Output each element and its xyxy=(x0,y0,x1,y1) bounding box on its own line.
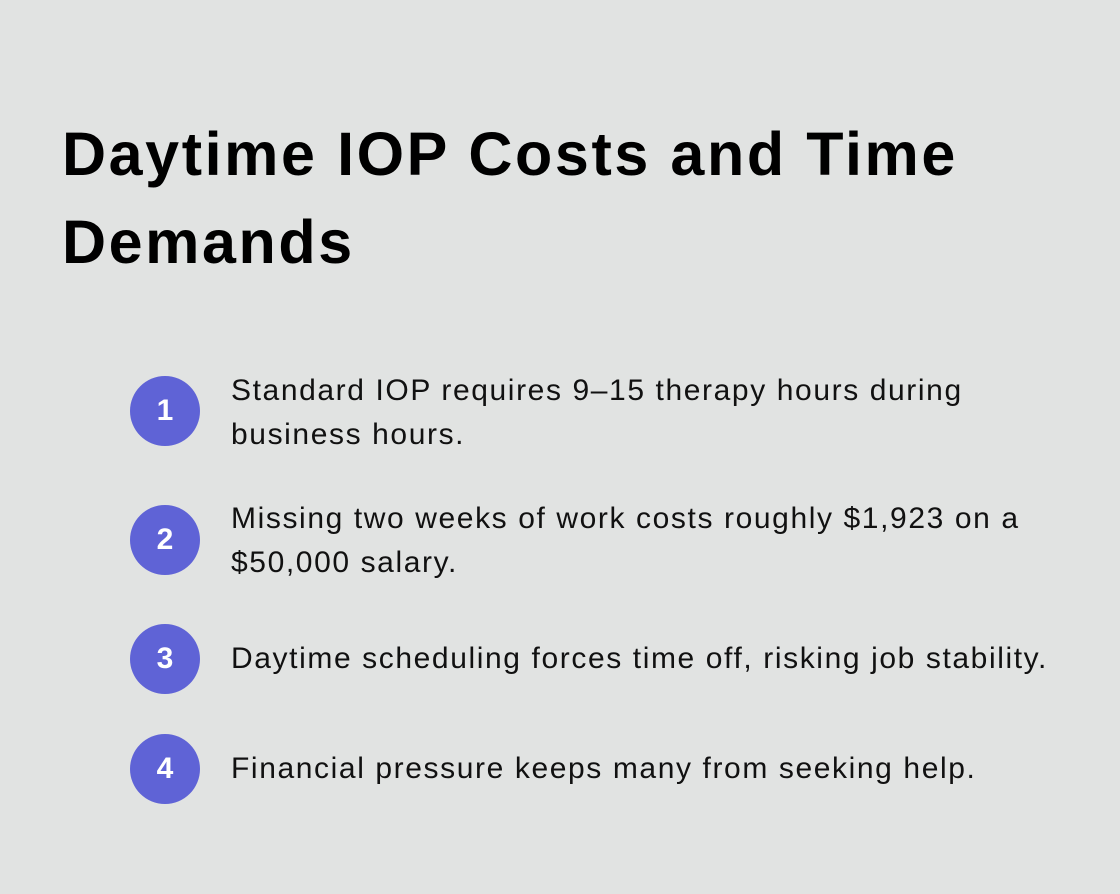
badge 4: 4 xyxy=(157,752,173,785)
badge 1: 1 xyxy=(157,394,173,427)
text 3: Daytime scheduling forces time off, risking job stability. xyxy=(231,642,1048,675)
item 3 xyxy=(130,624,1048,694)
badge 2 xyxy=(130,505,200,575)
badge 4 xyxy=(130,734,200,804)
title: Daytime IOP Costs and Time xyxy=(62,120,958,188)
text 4: Financial pressure keeps many from seeking help. xyxy=(231,752,976,785)
text 2: $50,000 salary. xyxy=(231,546,458,579)
badge 2: 2 xyxy=(157,523,173,556)
text 2 xyxy=(231,502,1020,579)
item 2 xyxy=(130,502,1020,579)
text 1: Standard IOP requires 9–15 therapy hours during xyxy=(231,374,963,407)
text 1 xyxy=(231,374,963,451)
title: Demands xyxy=(62,208,355,276)
item 1 xyxy=(130,374,963,451)
badge 1 xyxy=(130,376,200,446)
badge 3: 3 xyxy=(157,642,173,675)
badge 3 xyxy=(130,624,200,694)
item 4 xyxy=(130,734,976,804)
title xyxy=(62,120,958,276)
text 2: Missing two weeks of work costs roughly $1,923 on a xyxy=(231,502,1020,535)
text 1: business hours. xyxy=(231,418,465,451)
